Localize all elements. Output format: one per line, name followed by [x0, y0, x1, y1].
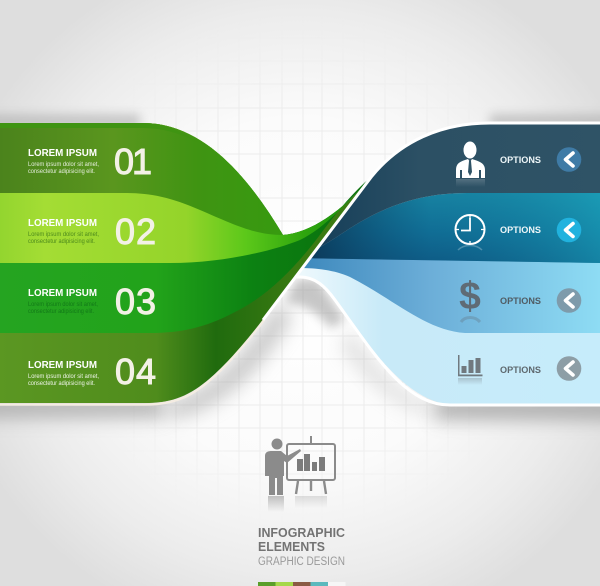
icon: bar chart [458, 355, 482, 385]
option 3 label and button [500, 288, 581, 313]
icon: presenter at board [265, 436, 335, 512]
band 04 [0, 123, 372, 403]
option 4 label and button: OPTIONS [500, 365, 542, 376]
band 03 [0, 123, 372, 333]
left text: item 01 [28, 141, 151, 182]
left text: item 02: Lorem ipsum dolor sit amet, [28, 231, 99, 238]
footer title [258, 526, 345, 568]
left text: item 04: LOREM IPSUM [28, 360, 97, 371]
option 2 label and button [500, 218, 581, 242]
left text: item 03: Lorem ipsum dolor sit amet, [28, 301, 98, 308]
left text: item 03: consectetur adipisicing elit. [28, 308, 94, 315]
soft ribbon shadows [0, 114, 140, 128]
left text: item 01: Lorem ipsum dolor sit amet, [28, 161, 99, 168]
white outline [263, 123, 600, 320]
band 01 [0, 123, 283, 235]
band teal [292, 193, 600, 263]
left green ribbon [0, 123, 372, 404]
left text: item 03: 03 [115, 281, 157, 322]
band light blue bottom [290, 262, 600, 404]
left text: item 02: consectetur adipisicing elit. [28, 238, 95, 245]
left text: item 02 [28, 211, 157, 252]
left text: item 02: 02 [115, 211, 157, 252]
icon: clock [456, 215, 484, 250]
band mid blue [292, 258, 600, 333]
option 2 label and button: OPTIONS [500, 225, 542, 236]
band 02 [0, 123, 372, 263]
icon: dollar: $ [459, 275, 481, 318]
left text: item 04 [28, 351, 157, 392]
colour strip [258, 582, 346, 586]
option 1 label and button: OPTIONS [500, 155, 542, 166]
left text: item 03: LOREM IPSUM [28, 288, 97, 299]
footer title: ELEMENTS [258, 540, 325, 554]
icon: businessman [456, 142, 485, 187]
option 1 label and button [500, 147, 581, 172]
left text: item 04: 04 [115, 351, 157, 392]
option 4 label and button [500, 356, 581, 381]
left text: item 04: consectetur adipisicing elit. [28, 380, 95, 387]
option 3 label and button: OPTIONS [500, 296, 542, 307]
footer title: INFOGRAPHIC [258, 526, 345, 540]
left text: item 03 [28, 281, 157, 322]
band dark [320, 124, 600, 247]
left text: item 02: LOREM IPSUM [28, 218, 97, 229]
left text: item 01: LOREM IPSUM [28, 148, 97, 159]
left text: item 01: consectetur adipisicing elit. [28, 168, 95, 175]
left text: item 01: 01 [114, 141, 151, 182]
left text: item 04: Lorem ipsum dolor sit amet, [28, 373, 99, 380]
footer title: GRAPHIC DESIGN [258, 556, 345, 568]
lower cream edge [0, 320, 264, 404]
right blue ribbon [263, 120, 600, 405]
